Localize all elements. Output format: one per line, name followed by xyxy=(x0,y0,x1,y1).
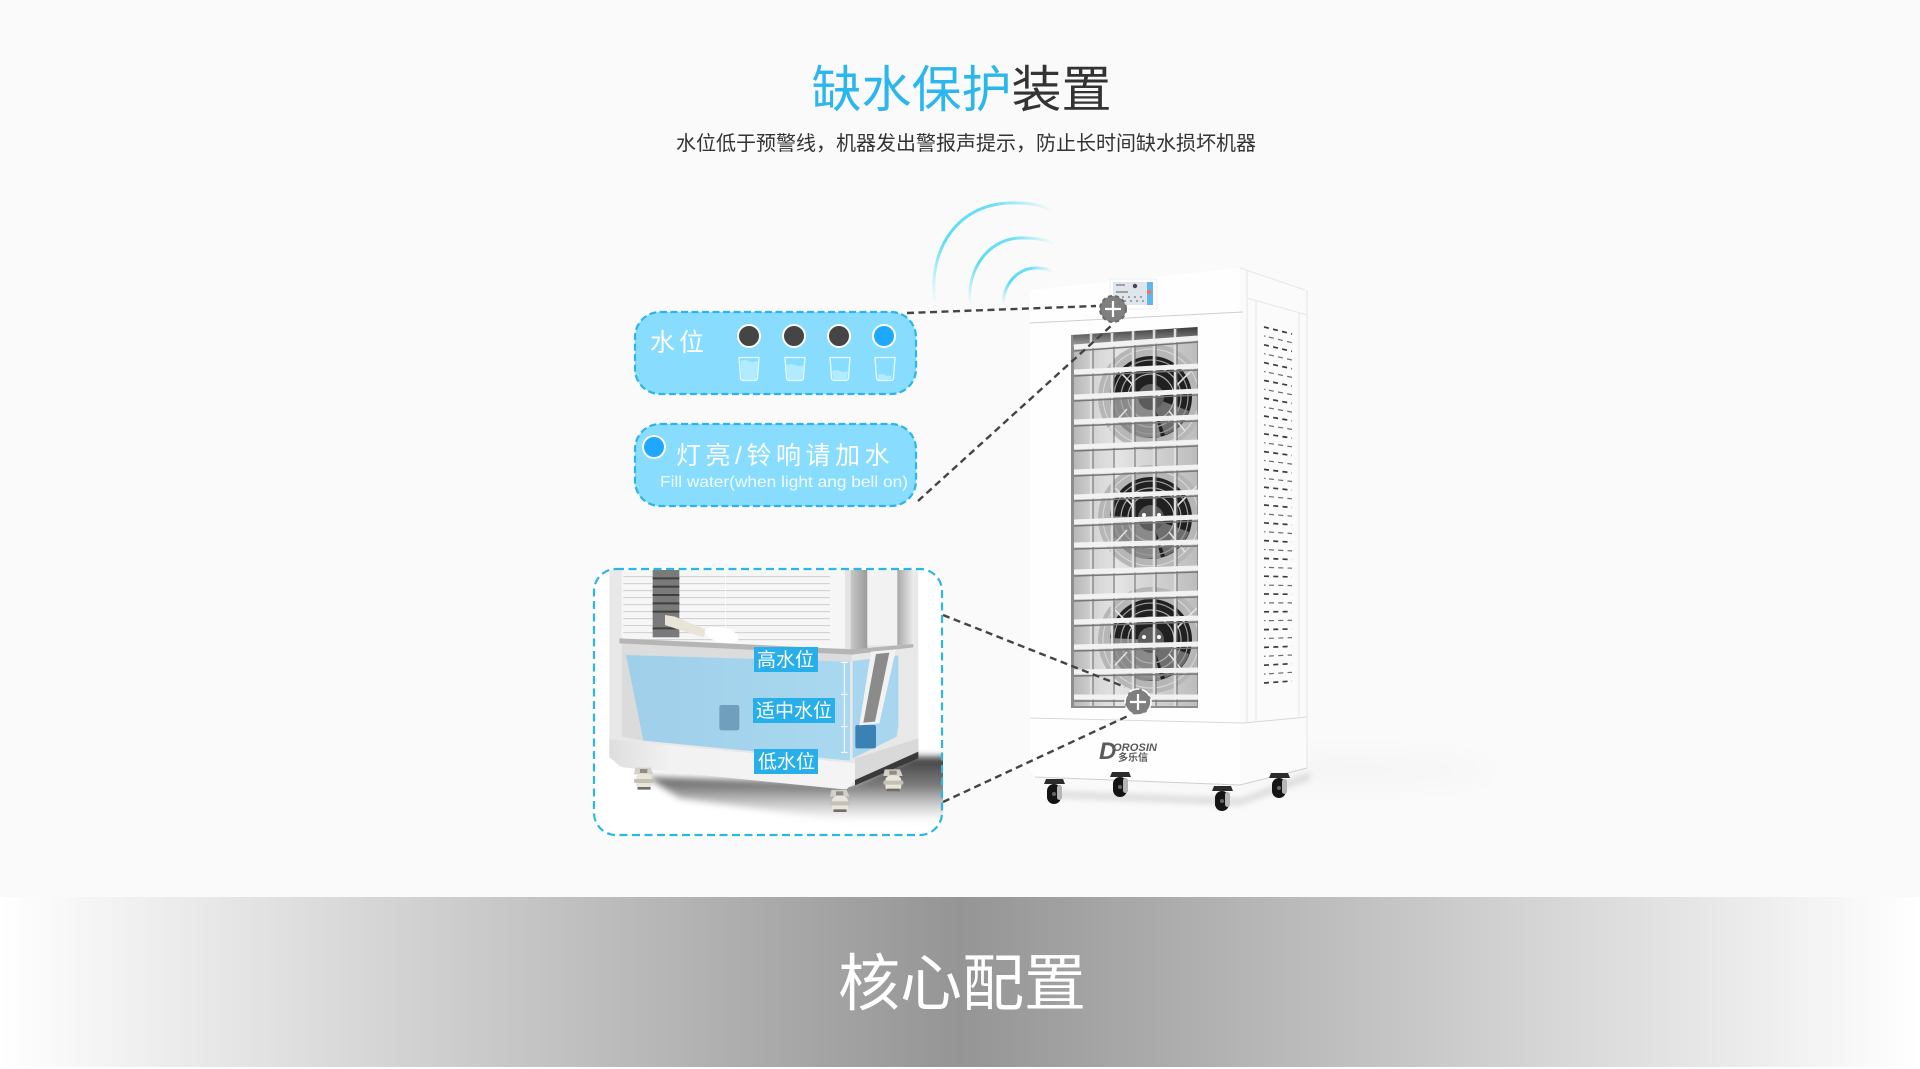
panel: water level indicators xyxy=(635,312,916,394)
warning text: 灯亮/铃响请加水 xyxy=(676,442,894,470)
brand logo xyxy=(1099,738,1158,765)
warning light xyxy=(643,436,665,458)
label: low water level: 低水位 xyxy=(758,751,815,773)
connector lines xyxy=(907,306,1130,802)
brand logo: OROSIN xyxy=(1113,742,1158,754)
banner heading: 核心配置 xyxy=(838,950,1086,1019)
fans xyxy=(1073,327,1204,693)
grille vertical bars xyxy=(1091,329,1175,706)
label: medium water level: 适中水位 xyxy=(756,700,832,722)
warning text english: Fill water(when light ang bell on) xyxy=(660,474,908,491)
cabinet front xyxy=(1030,268,1240,785)
casters xyxy=(1044,772,1290,811)
cabinet side xyxy=(1240,268,1307,785)
inset: water tank detail xyxy=(593,568,950,836)
icon: alarm sound waves xyxy=(934,203,1055,305)
hotspot: water tank xyxy=(1125,689,1151,715)
grille slats xyxy=(1074,342,1198,701)
subtitle: 水位低于预警线，机器发出警报声提示，防止长时间缺水损坏机器 xyxy=(676,132,1256,155)
cabinet edges xyxy=(1030,268,1307,785)
title: 缺水保护装置 xyxy=(812,62,1112,118)
brand logo: 多乐信 xyxy=(1118,751,1148,764)
brand logo: D xyxy=(1099,738,1116,765)
grille with fans xyxy=(1071,327,1204,708)
hotspot: control panel xyxy=(1100,296,1126,322)
water level scale xyxy=(841,662,848,752)
tank cutaway render xyxy=(609,570,950,822)
icon: beakers at four water levels xyxy=(739,358,895,380)
floor shadow xyxy=(1050,756,1500,806)
side vents xyxy=(1264,327,1292,683)
panel: refill warning xyxy=(635,424,916,506)
label: water level: 水位 xyxy=(650,329,708,357)
section banner xyxy=(0,897,1920,1069)
indicator lights xyxy=(738,325,895,347)
inset dashed border xyxy=(594,569,942,835)
product: evaporative air cooler xyxy=(1030,268,1500,811)
label: high water level: 高水位 xyxy=(757,649,814,671)
control panel xyxy=(1110,279,1157,309)
